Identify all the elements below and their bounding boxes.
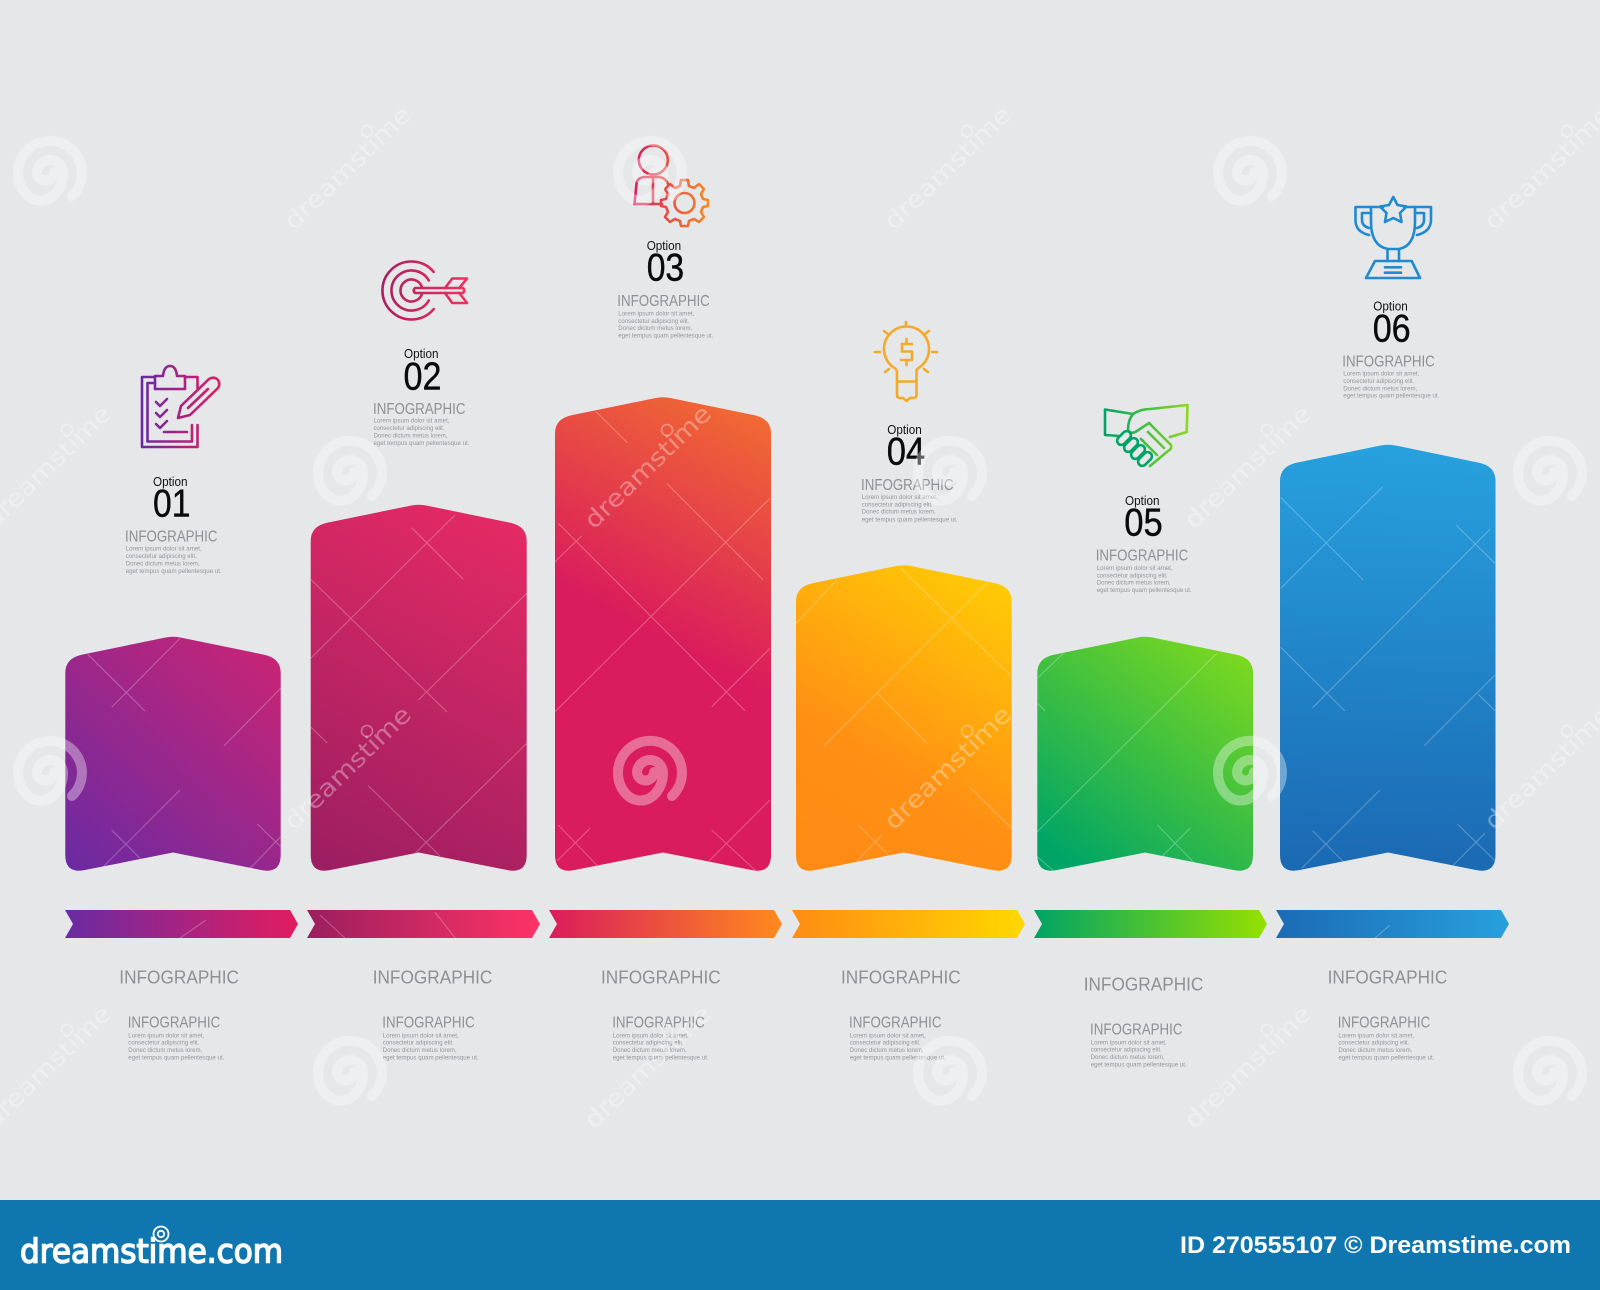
bar 3 red orange xyxy=(555,397,771,871)
bottom text column 4: Donec dictum metus lorem, xyxy=(850,1047,924,1054)
bottom text column 3: Lorem ipsum dolor sit amet, xyxy=(613,1033,689,1040)
bar 5 green xyxy=(1037,637,1253,871)
option 1 text: eget tempus quam pellentesque ut. xyxy=(126,568,222,575)
option 2 text: INFOGRAPHIC xyxy=(373,401,466,418)
bottom text column 4: Lorem ipsum dolor sit amet, xyxy=(850,1033,926,1040)
option 3 text xyxy=(617,238,713,339)
arrow 6 xyxy=(1276,910,1509,938)
option 5 text: Option xyxy=(1125,493,1160,508)
watermark: crossing lines xyxy=(88,412,1495,938)
bar 4 amber xyxy=(796,565,1012,871)
watermark: swirl logos xyxy=(18,141,1582,1101)
bar 1 purple xyxy=(65,637,281,871)
watermark: diagonal dreamstime text: dreamstime xyxy=(579,1000,717,1134)
bottom text column 3: consectetur adipiscing elit. xyxy=(613,1040,684,1047)
bottom text column 5: consectetur adipiscing elit. xyxy=(1091,1047,1162,1054)
option 4 text: eget tempus quam pellentesque ut. xyxy=(862,516,958,523)
bottom text column 4: eget tempus quam pellentesque ut. xyxy=(850,1054,946,1061)
option 4 text xyxy=(861,422,958,523)
bottom text column 5: eget tempus quam pellentesque ut. xyxy=(1091,1061,1187,1068)
bottom text column 4: INFOGRAPHIC xyxy=(849,1015,942,1032)
option 6 text: Option xyxy=(1373,299,1408,314)
bottom text column 4 xyxy=(841,966,961,1061)
option 2 text: Lorem ipsum dolor sit amet, xyxy=(374,418,450,425)
footer logo: dreamstime.com: dreamstime.com xyxy=(20,1232,283,1271)
option 6 text: Lorem ipsum dolor sit amet, xyxy=(1343,371,1419,378)
option 4 text: 04 xyxy=(887,431,925,474)
watermark: diagonal dreamstime text: dreamstime xyxy=(1479,101,1600,235)
bottom text column 6: eget tempus quam pellentesque ut. xyxy=(1338,1054,1435,1061)
option 3 text: INFOGRAPHIC xyxy=(617,293,710,310)
option 1 text: 01 xyxy=(153,483,190,526)
bottom text column 6: Lorem ipsum dolor sit amet, xyxy=(1338,1033,1415,1040)
bottom text column 2: eget tempus quam pellentesque ut. xyxy=(383,1054,479,1061)
icon: trophy with star xyxy=(1356,197,1431,278)
footer image id: ID 270555107 © Dreamstime.com xyxy=(1180,1232,1571,1259)
footer band xyxy=(0,1200,1600,1290)
option 5 text: INFOGRAPHIC xyxy=(1096,548,1188,565)
option 6 text: consectetur adipiscing elit. xyxy=(1343,378,1414,385)
bottom text column 5: Donec dictum metus lorem, xyxy=(1091,1054,1165,1061)
bottom text column 6: INFOGRAPHIC xyxy=(1338,1015,1430,1032)
option 6 text: INFOGRAPHIC xyxy=(1342,354,1435,371)
watermark: diagonal dreamstime text: dreamstime xyxy=(1479,701,1600,835)
arrow 1 xyxy=(65,910,298,938)
option 2 text: 02 xyxy=(404,355,442,398)
option 1 text: Lorem ipsum dolor sit amet, xyxy=(126,546,202,553)
option 2 text: Donec dictum metus lorem, xyxy=(374,432,448,439)
option 1 text: Option xyxy=(153,474,188,489)
option 1 text xyxy=(125,474,222,575)
bottom text column 3: eget tempus quam pellentesque ut. xyxy=(613,1054,709,1061)
bottom text column 1: Lorem ipsum dolor sit amet, xyxy=(128,1033,204,1040)
option 2 text: consectetur adipiscing elit. xyxy=(374,425,445,432)
option 1 text: Donec dictum metus lorem, xyxy=(126,561,200,568)
panel: bars xyxy=(65,397,1495,871)
option 2 text xyxy=(373,346,470,447)
option 5 text xyxy=(1096,493,1192,594)
bottom text column 5: INFOGRAPHIC xyxy=(1084,973,1203,994)
option 3 text: Lorem ipsum dolor sit amet, xyxy=(618,311,694,318)
bottom text column 3 xyxy=(601,966,721,1061)
option 6 text: eget tempus quam pellentesque ut. xyxy=(1343,393,1439,400)
bottom text column 4: consectetur adipiscing elit. xyxy=(850,1040,921,1047)
icon: person with gear xyxy=(634,146,708,226)
option 4 text: consectetur adipiscing elit. xyxy=(862,501,933,508)
bottom text column 1: Donec dictum metus lorem, xyxy=(128,1047,202,1054)
option 1 text: INFOGRAPHIC xyxy=(125,528,218,545)
icon: dollar light bulb xyxy=(875,322,937,401)
option 5 text: 05 xyxy=(1124,501,1163,544)
option 6 text xyxy=(1342,299,1439,400)
bottom text column 3: INFOGRAPHIC xyxy=(601,966,721,987)
bottom text column 5: INFOGRAPHIC xyxy=(1090,1022,1182,1039)
option 3 text: Option xyxy=(647,238,681,253)
bottom text column 2: consectetur adipiscing elit. xyxy=(383,1040,454,1047)
bottom text column 1: eget tempus quam pellentesque ut. xyxy=(128,1054,224,1061)
option 2 text: Option xyxy=(404,346,438,361)
footer logo swirl xyxy=(154,1226,168,1242)
bottom text column 6: Donec dictum metus lorem, xyxy=(1338,1047,1413,1054)
bottom text column 6: consectetur adipiscing elit. xyxy=(1338,1040,1410,1047)
option 3 text: Donec dictum metus lorem, xyxy=(618,325,692,332)
panel: arrow timeline xyxy=(65,910,1509,938)
bottom text column 2: INFOGRAPHIC xyxy=(382,1015,475,1032)
bottom text column 1: INFOGRAPHIC xyxy=(128,1015,220,1032)
bottom text column 4: INFOGRAPHIC xyxy=(841,966,961,987)
bottom text column 1: consectetur adipiscing elit. xyxy=(128,1040,199,1047)
option 6 text: 06 xyxy=(1373,307,1411,350)
option 4 text: Donec dictum metus lorem, xyxy=(862,509,936,516)
watermark: diagonal dreamstime text: dreamstime xyxy=(1179,1000,1317,1134)
option 5 text: eget tempus quam pellentesque ut. xyxy=(1097,587,1192,594)
bottom text column 1 xyxy=(119,966,239,1061)
option 2 text: eget tempus quam pellentesque ut. xyxy=(374,440,470,447)
watermark: diagonal dreamstime text: dreamstime xyxy=(1179,400,1317,534)
watermark: small swirl marks above the diagonal text xyxy=(62,126,1572,1036)
watermark: diagonal dreamstime text: dreamstime xyxy=(879,101,1017,235)
arrow 2 xyxy=(307,910,540,938)
option 3 text: 03 xyxy=(647,247,684,290)
icon: clipboard checklist xyxy=(142,366,219,447)
icon: target with arrow xyxy=(382,262,467,320)
watermark: diagonal dreamstime text: dreamstime xyxy=(579,400,717,534)
option 5 text: consectetur adipiscing elit. xyxy=(1097,572,1168,579)
option 3 text: eget tempus quam pellentesque ut. xyxy=(618,332,713,339)
bottom text column 5: Lorem ipsum dolor sit amet, xyxy=(1091,1040,1167,1047)
arrow 4 xyxy=(792,910,1025,938)
bottom text column 2 xyxy=(373,966,492,1061)
icon: handshake xyxy=(1105,405,1188,468)
bottom text column 2: Lorem ipsum dolor sit amet, xyxy=(383,1033,459,1040)
bottom text column 2: Donec dictum metus lorem, xyxy=(383,1047,457,1054)
bar 6 blue xyxy=(1280,445,1496,871)
arrow 3 xyxy=(549,910,782,938)
option 4 text: Option xyxy=(887,422,922,437)
bottom text column 5 xyxy=(1084,973,1203,1068)
option 4 text: INFOGRAPHIC xyxy=(861,477,954,494)
watermark: diagonal dreamstime text: dreamstime xyxy=(879,701,1017,835)
bottom text column 1: INFOGRAPHIC xyxy=(119,966,239,987)
arrow 5 xyxy=(1034,910,1267,938)
watermark: diagonal dreamstime text: dreamstime xyxy=(279,701,417,835)
bottom text column 6 xyxy=(1328,966,1447,1061)
watermark: diagonal dreamstime text: dreamstime xyxy=(279,101,417,235)
option 4 text: Lorem ipsum dolor sit amet, xyxy=(862,494,938,501)
option 5 text: Donec dictum metus lorem, xyxy=(1097,580,1171,587)
option 3 text: consectetur adipiscing elit. xyxy=(618,318,689,325)
bottom text column 2: INFOGRAPHIC xyxy=(373,966,492,987)
option 6 text: Donec dictum metus lorem, xyxy=(1343,385,1417,392)
option 5 text: Lorem ipsum dolor sit amet, xyxy=(1097,565,1173,572)
bottom text column 6: INFOGRAPHIC xyxy=(1328,966,1447,987)
bar 2 crimson xyxy=(311,505,527,871)
bottom text column 3: INFOGRAPHIC xyxy=(612,1015,705,1032)
bottom text column 3: Donec dictum metus lorem, xyxy=(613,1047,687,1054)
option 1 text: consectetur adipiscing elit. xyxy=(126,553,197,560)
